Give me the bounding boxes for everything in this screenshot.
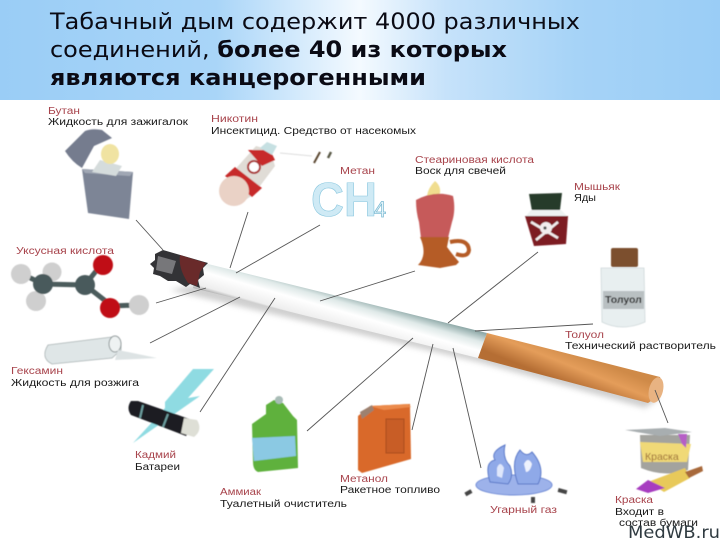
label: arsenic [574,182,621,204]
icon: CH4 formula: 4 [374,197,386,222]
label: cadmium: Кадмий [135,450,176,461]
label: hexamine: Жидкость для розжига [11,378,140,389]
label: hexamine: Гексамин [11,366,63,377]
label: toluene [565,330,716,352]
icon: acetic acid molecule [11,255,149,318]
icon: ammonia bottle [252,396,298,472]
icon: toluene bottle: Толуол [605,294,642,306]
label: arsenic: Яды [574,193,596,204]
label: cadmium [135,450,180,473]
label: ammonia [220,487,347,510]
label: toluene: Технический растворитель [565,341,716,352]
label: ammonia: Туалетный очиститель [220,499,347,510]
label: acetic acid: Уксусная кислота [16,246,115,257]
label: methanol: Ракетное топливо [340,485,441,496]
leader lines [136,212,668,468]
label: carbon monoxide: Угарный газ [490,505,557,516]
title [49,10,580,91]
icon: battery with lightning [128,369,214,443]
label: methane: Метан [340,166,375,177]
label: hexamine [11,366,140,389]
icon: nicotine bottle [219,142,331,206]
title: соединений, более 40 из которых [50,38,507,63]
label: nicotine: Инсектицид. Средство от насекомых [211,126,416,137]
icon: methanol canister [358,404,411,473]
icon: lighter [65,129,133,219]
label: ammonia: Аммиак [220,487,262,498]
title: Табачный дым содержит 4000 различных [49,10,580,35]
label: butane: Бутан [48,106,80,117]
icon: paint can and brush [625,428,703,493]
label: butane [48,106,189,128]
label: stearic acid: Воск для свечей [415,166,506,177]
icon: CH4 formula: CH [311,174,377,227]
label: methanol: Метанол [340,474,388,485]
title: являются канцерогенными [50,66,426,91]
label: cadmium: Батареи [135,462,180,473]
label: paint: Входит в [615,507,664,518]
icon: arsenic bottle [525,193,568,246]
label: nicotine [211,114,416,137]
label: stearic acid: Стеариновая кислота [415,155,535,166]
label: paint: состав бумаги [619,517,698,529]
label: nicotine: Никотин [211,114,258,125]
label: arsenic: Мышьяк [574,182,621,193]
label: paint: Краска [615,495,654,506]
header band [0,0,720,100]
label: methanol [340,474,441,496]
icon: gas flame [464,445,567,503]
cigarette [150,250,666,408]
label: toluene: Толуол [565,330,604,341]
label: stearic acid [415,155,535,177]
icon: toluene bottle [601,248,645,327]
label: butane: Жидкость для зажигалок [48,117,189,128]
icon: hexamine vial [45,336,157,364]
icon: paint can and brush: Краска [645,451,679,463]
label: paint [615,495,698,529]
icon: candle [416,181,469,268]
